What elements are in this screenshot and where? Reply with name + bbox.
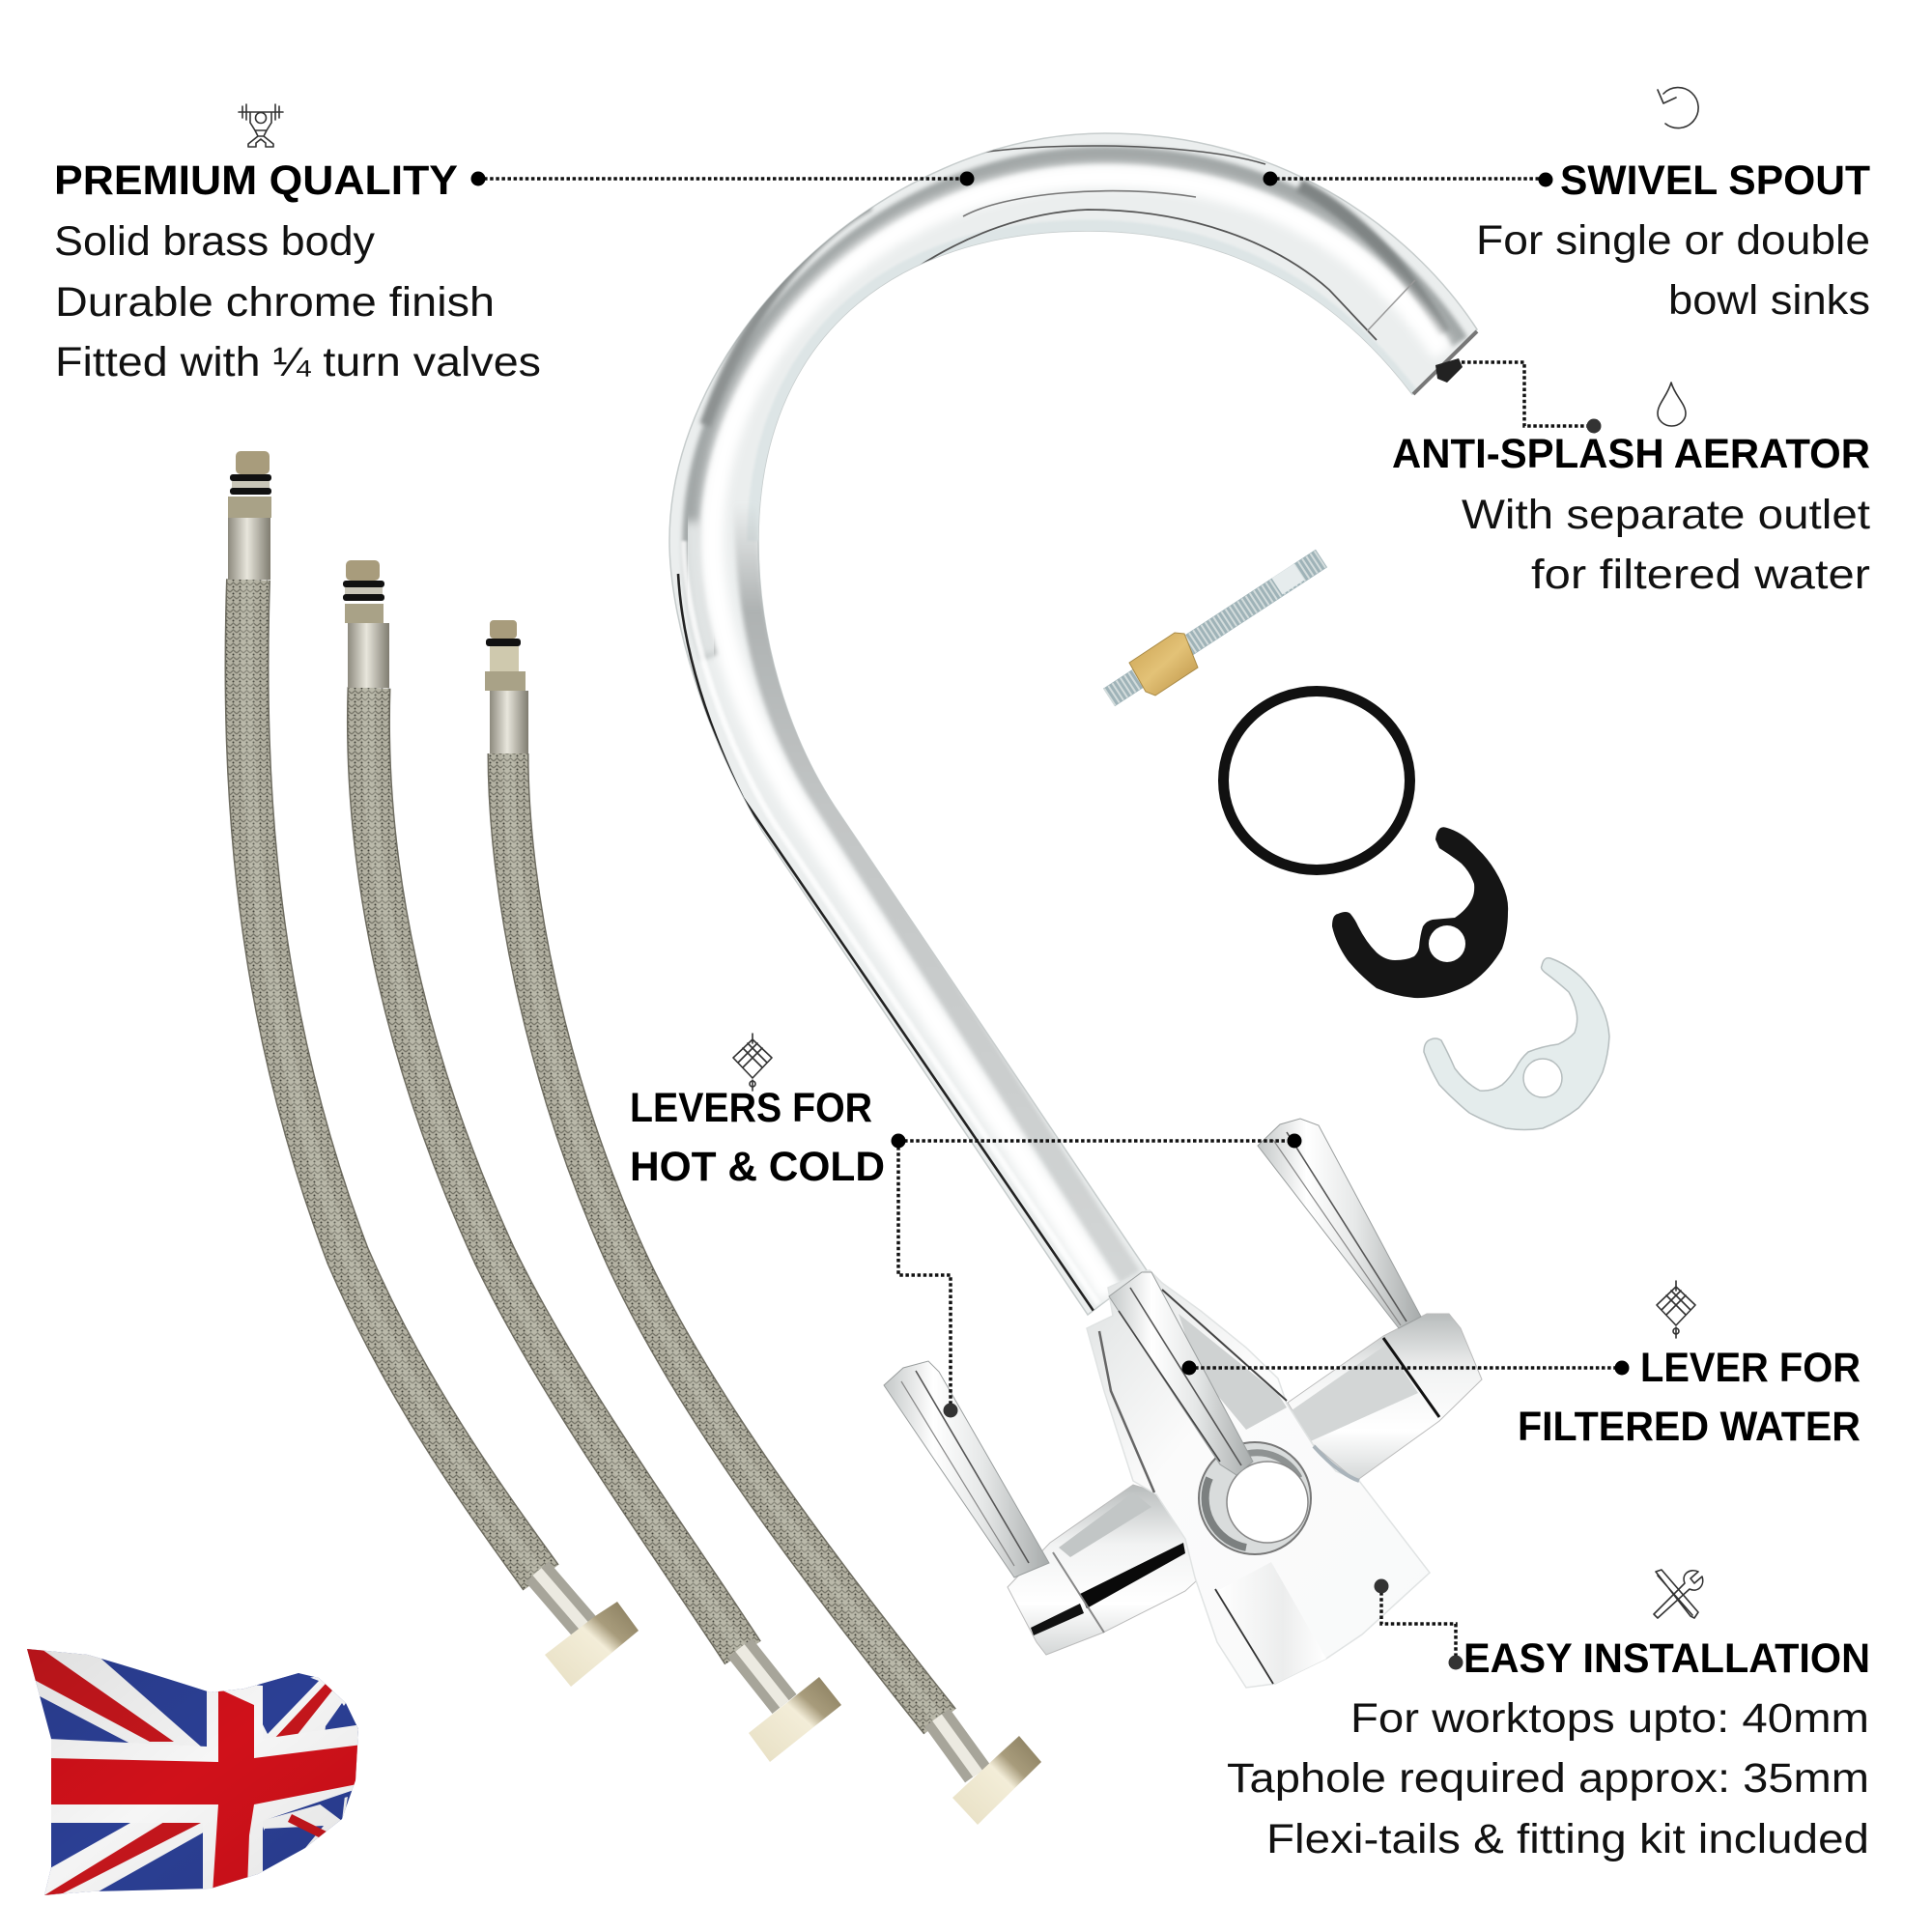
body text: For worktops upto: 40mm xyxy=(1350,1695,1869,1742)
body text: Solid brass body xyxy=(54,218,376,265)
threaded bolt xyxy=(1109,558,1321,697)
silver plate xyxy=(1424,958,1609,1130)
aerator xyxy=(1413,331,1477,394)
heading: LEVER FOR xyxy=(1640,1345,1861,1391)
leader line xyxy=(471,172,974,185)
hose 3 xyxy=(485,620,1041,1825)
icon: weightlifter xyxy=(239,104,283,147)
callout: levers for hot and cold xyxy=(630,1034,1302,1418)
body text xyxy=(1462,492,1870,598)
body text: Flexi-tails & fitting kit included xyxy=(1266,1816,1869,1862)
body xyxy=(1087,1270,1430,1688)
filter lever xyxy=(1109,1272,1253,1475)
hose 1 xyxy=(228,451,639,1687)
body text: Fitted with ¼ turn valves xyxy=(55,339,541,385)
heading xyxy=(1518,1345,1861,1450)
leader line xyxy=(1264,172,1553,187)
icon: tools xyxy=(1654,1570,1703,1618)
heading: SWIVEL SPOUT xyxy=(1560,157,1870,204)
faucet handles and body xyxy=(884,1119,1482,1688)
body text: for filtered water xyxy=(1531,552,1870,598)
heading xyxy=(630,1085,885,1190)
hose 2 xyxy=(343,560,841,1762)
left lever cylinder xyxy=(1008,1485,1196,1655)
icon: water drop xyxy=(1658,383,1686,426)
black plate xyxy=(1332,827,1508,998)
icon: knot xyxy=(733,1034,772,1091)
heading: EASY INSTALLATION xyxy=(1463,1635,1870,1682)
leader line xyxy=(1182,1360,1629,1376)
callout: swivel spout xyxy=(1264,88,1870,324)
callout: premium quality xyxy=(54,104,974,385)
fitting kit xyxy=(1109,558,1609,1130)
heading: PREMIUM QUALITY xyxy=(54,157,458,204)
icon: knot xyxy=(1657,1281,1695,1338)
body text: Taphole required approx: 35mm xyxy=(1227,1755,1869,1802)
flexi hoses xyxy=(228,451,1041,1825)
heading: LEVERS FOR xyxy=(630,1085,872,1131)
body text xyxy=(54,218,541,385)
heading: FILTERED WATER xyxy=(1518,1404,1861,1450)
spout collar seam xyxy=(1367,280,1415,331)
right lever cylinder xyxy=(1288,1314,1482,1481)
leader line xyxy=(1374,1578,1463,1669)
body text xyxy=(1476,217,1870,324)
callout: anti-splash aerator xyxy=(1392,362,1870,598)
body text: With separate outlet xyxy=(1462,492,1870,538)
icon: rotate xyxy=(1658,88,1698,128)
left lever xyxy=(884,1361,1049,1577)
callout: easy installation xyxy=(1227,1570,1870,1862)
UK flag xyxy=(27,1649,358,1895)
filter lever ring xyxy=(1199,1442,1311,1554)
heading: ANTI-SPLASH AERATOR xyxy=(1392,431,1870,477)
right lever xyxy=(1258,1119,1421,1328)
leader line xyxy=(1462,362,1602,433)
body text xyxy=(1227,1695,1869,1862)
body text: For single or double xyxy=(1476,217,1870,264)
faucet spout xyxy=(669,133,1477,1315)
body text: bowl sinks xyxy=(1668,277,1870,324)
rubber ring xyxy=(1223,692,1410,869)
heading: HOT & COLD xyxy=(630,1144,885,1190)
callout: lever for filtered water xyxy=(1182,1281,1861,1450)
leader line xyxy=(891,1134,1302,1418)
body text: Durable chrome finish xyxy=(55,279,495,326)
